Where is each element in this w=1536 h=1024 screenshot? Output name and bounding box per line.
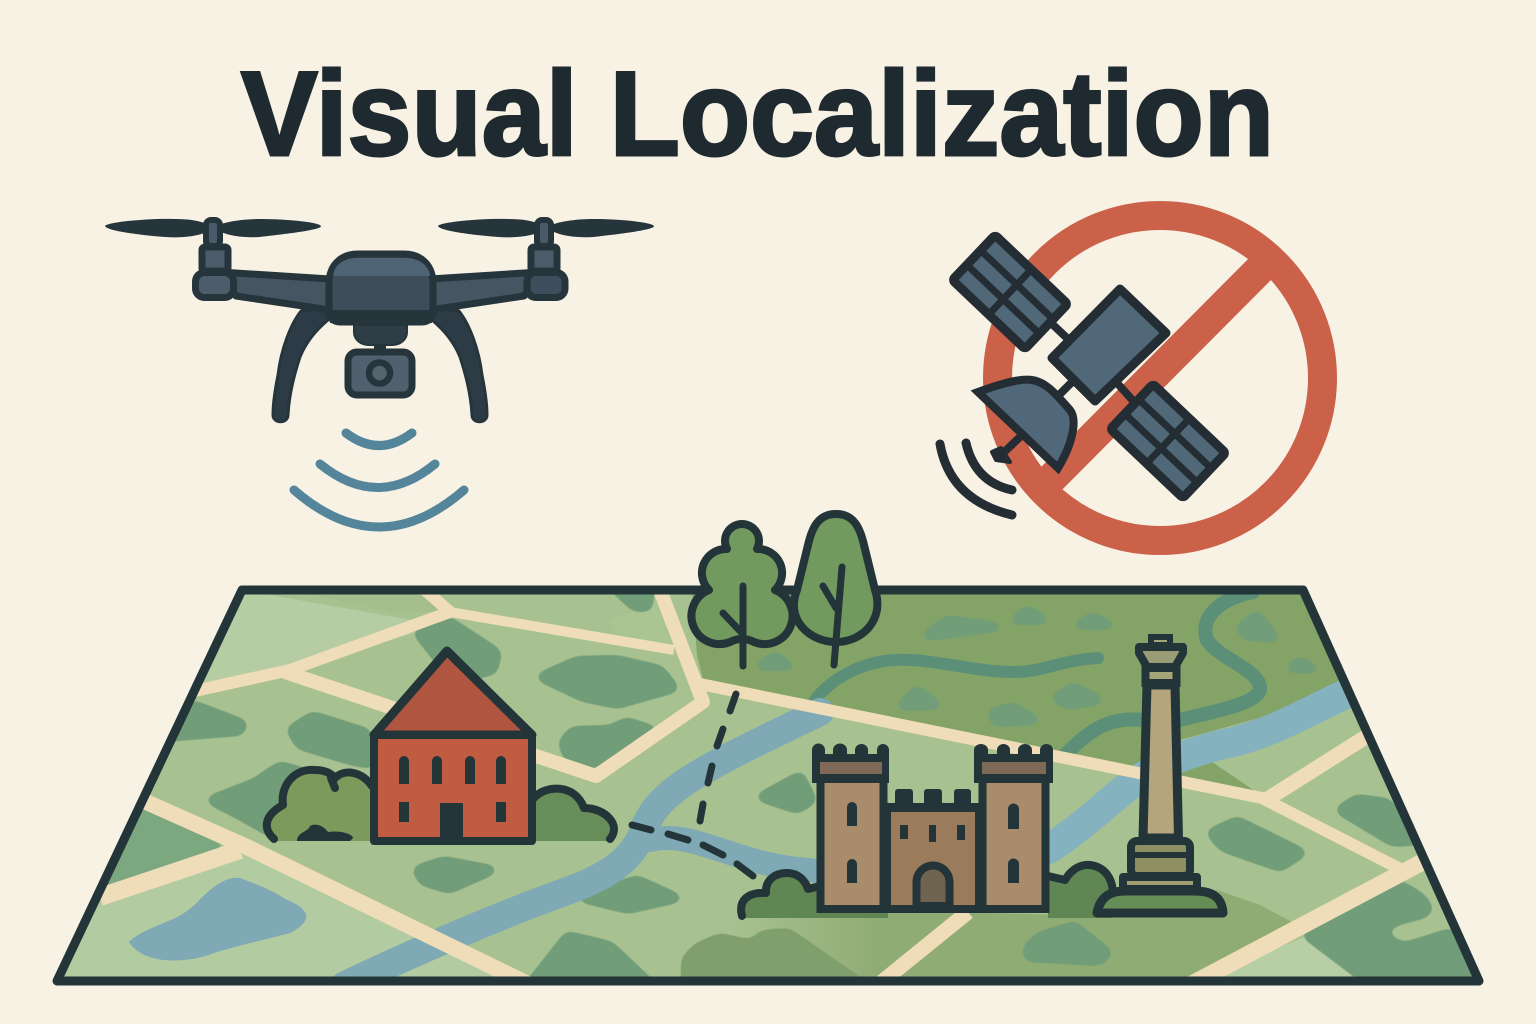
drone motor right	[531, 220, 557, 271]
castle right tower	[974, 744, 1053, 909]
monument base mound	[1097, 891, 1223, 913]
streams	[815, 592, 1260, 755]
castle centre keep	[885, 789, 985, 909]
house	[374, 651, 532, 841]
satellite connectors	[1050, 322, 1136, 404]
house wall	[374, 735, 532, 841]
tree: round	[691, 524, 793, 666]
monument shaft	[1143, 685, 1178, 838]
satellite body	[1052, 289, 1166, 401]
tree: poplar	[794, 514, 877, 665]
bush left of house	[266, 770, 372, 841]
bush right of castle	[1048, 865, 1113, 918]
drone gimbal	[354, 325, 407, 351]
drone arms	[196, 272, 565, 310]
map	[40, 514, 1500, 1000]
drone camera	[348, 352, 412, 395]
drone propeller right	[438, 219, 654, 237]
drone propeller left	[105, 219, 321, 237]
drone legs	[273, 308, 487, 422]
signal waves	[294, 433, 464, 527]
drone motor left	[202, 220, 228, 271]
satellite signal arcs	[940, 443, 1012, 515]
bush right of house	[534, 789, 614, 841]
title: Visual Localization	[241, 47, 1274, 181]
monument capital	[1139, 637, 1183, 683]
satellite solar panel lower	[1110, 384, 1226, 498]
roads	[100, 590, 1430, 985]
bush left of castle	[741, 873, 888, 918]
satellite solar panel upper	[952, 235, 1068, 349]
dashed route	[632, 694, 753, 876]
monument pedestal	[1123, 841, 1197, 889]
drone	[105, 219, 654, 527]
rivers and pond	[130, 692, 1350, 985]
house roof	[374, 651, 532, 735]
house windows and door	[399, 756, 506, 839]
prohibition sign	[998, 216, 1322, 540]
monument column	[1097, 637, 1223, 913]
satellite dish	[978, 380, 1074, 468]
no-GPS satellite	[940, 216, 1322, 540]
castle	[812, 744, 1053, 909]
drone body	[329, 254, 433, 323]
forest patches	[108, 594, 1472, 976]
castle left tower	[812, 744, 889, 909]
map border	[57, 590, 1479, 981]
